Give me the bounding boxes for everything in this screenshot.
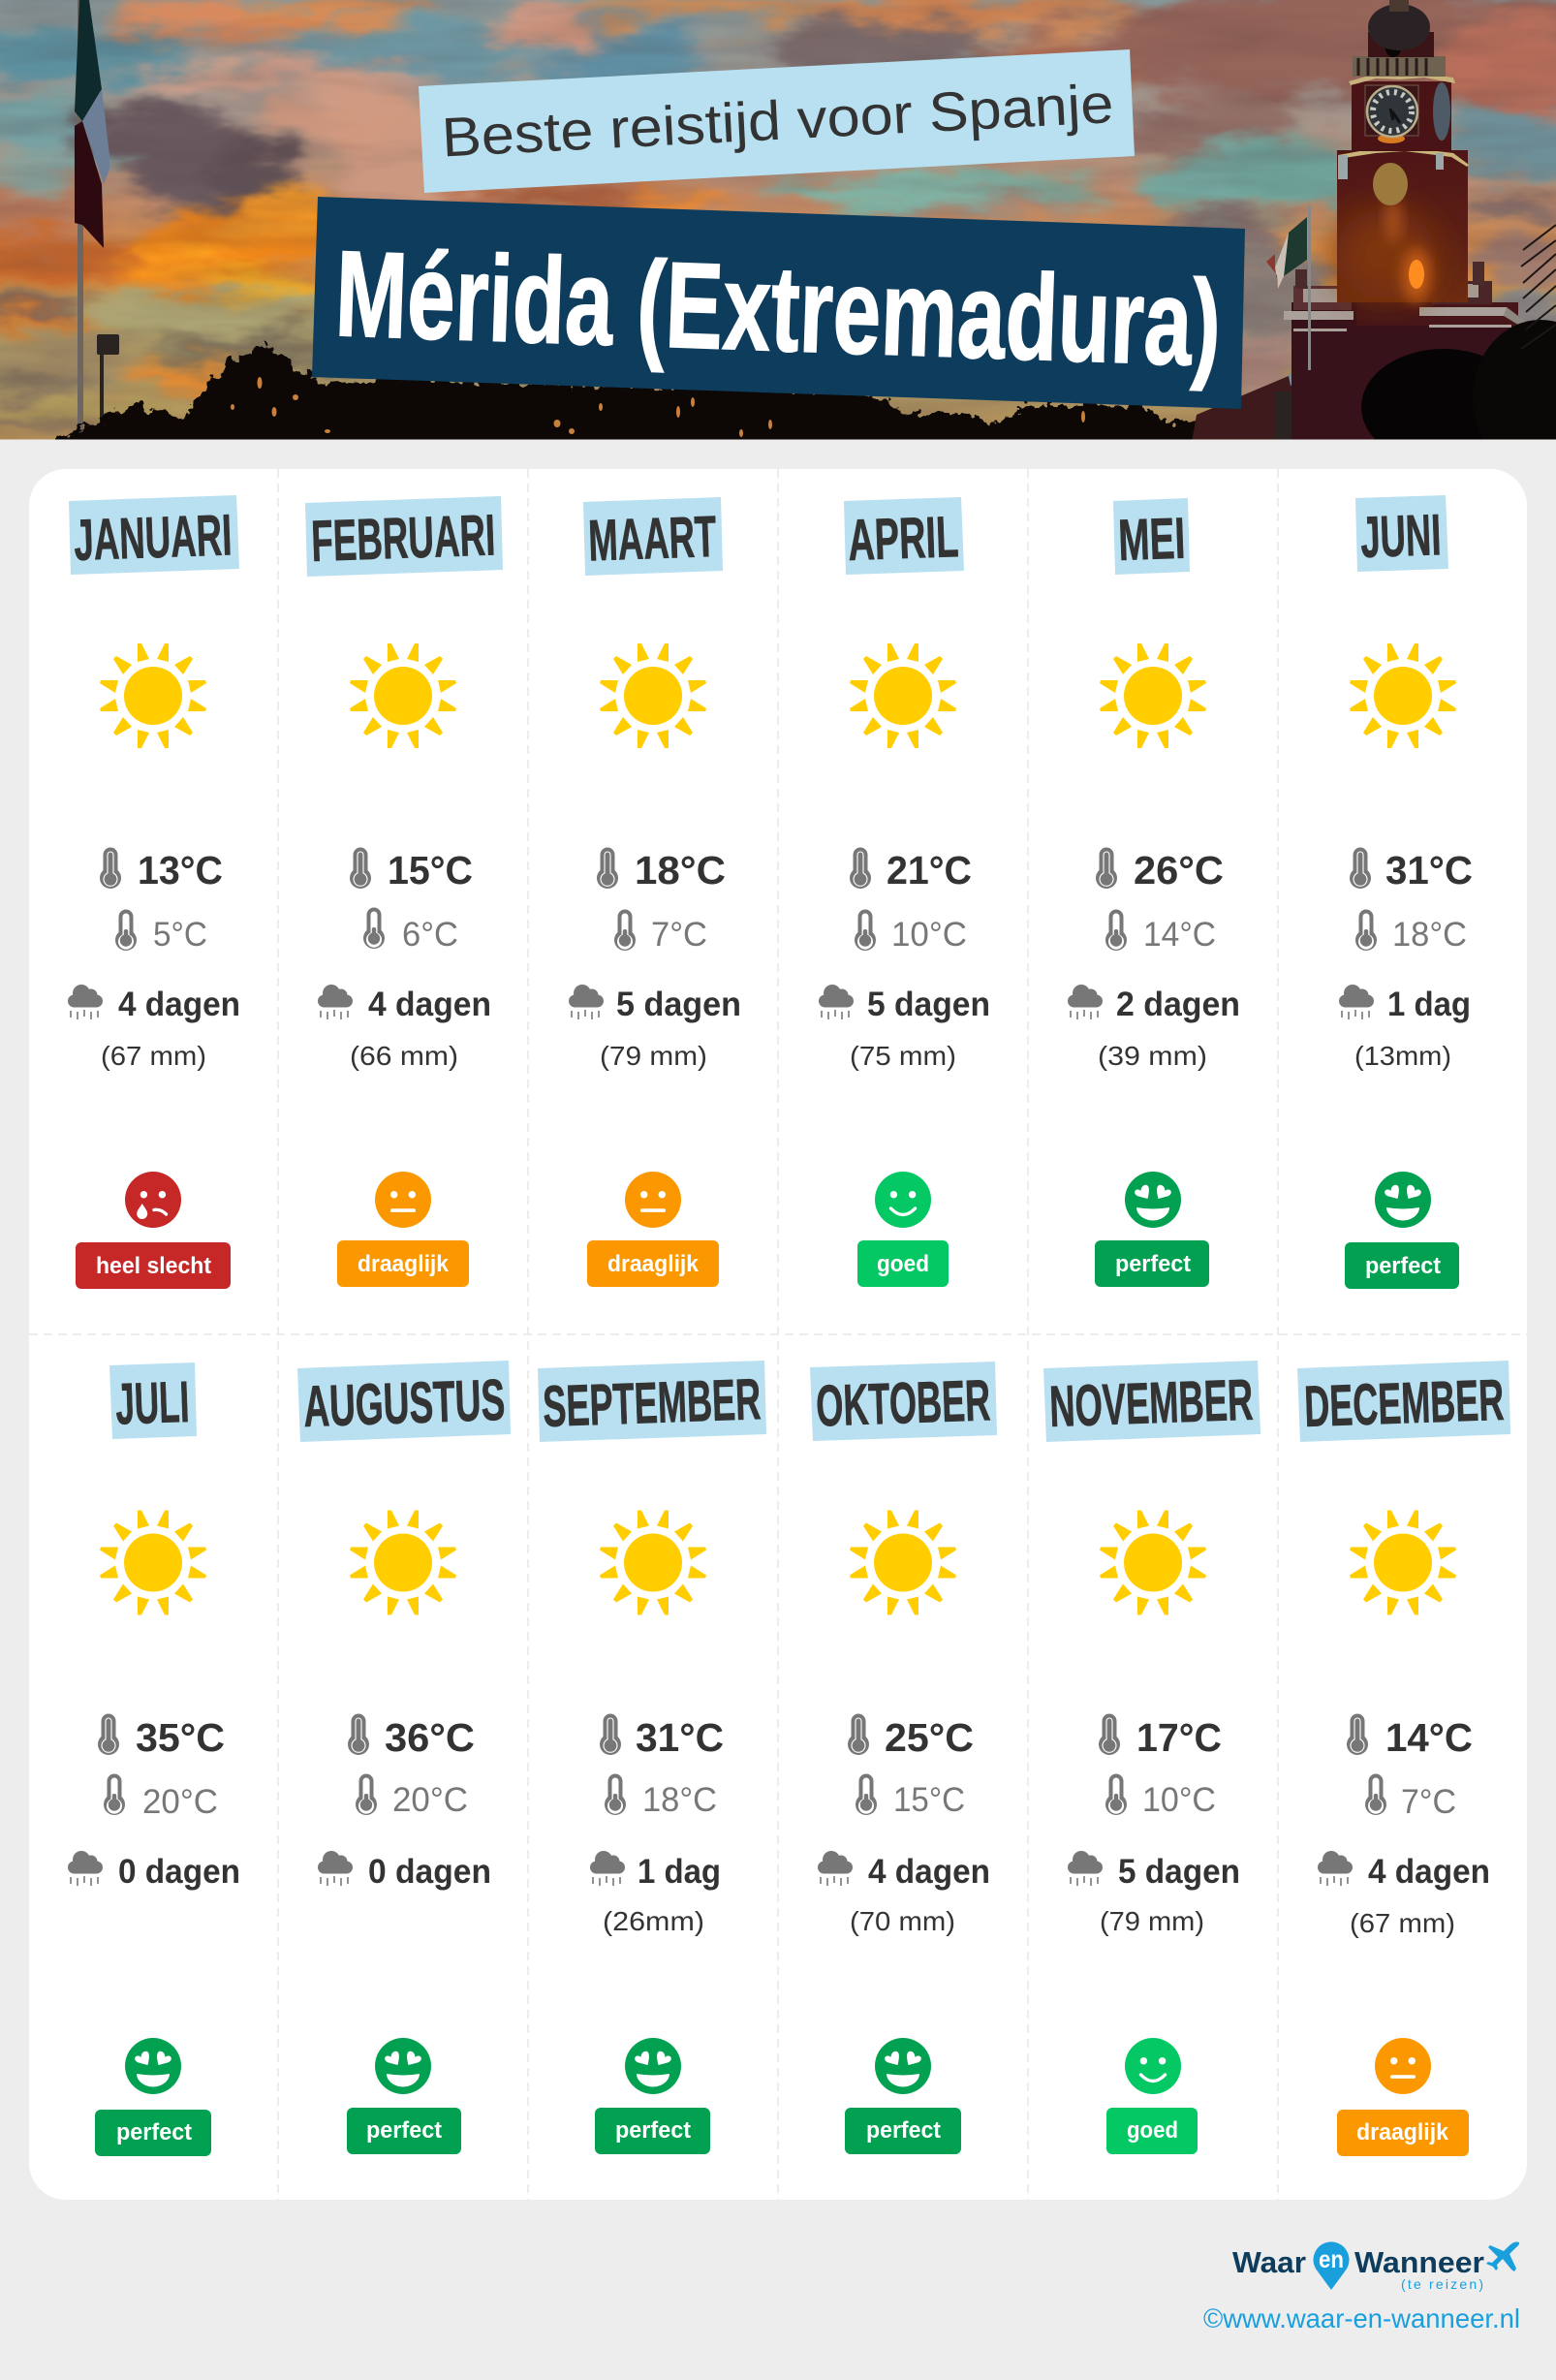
month label: AUGUSTUS xyxy=(302,1367,506,1439)
rainfall: (67 mm) xyxy=(101,1041,206,1071)
rating badge: heel slecht xyxy=(96,1253,211,1279)
month label: JULI xyxy=(114,1369,190,1436)
month: september xyxy=(538,1361,766,2154)
icon: sun xyxy=(100,643,206,748)
month label xyxy=(1355,495,1448,572)
cloud streak texture xyxy=(0,0,1556,440)
min temperature xyxy=(856,1773,965,1819)
rain days: 2 dagen xyxy=(1116,986,1240,1023)
max temperature: 31°C xyxy=(636,1715,724,1760)
cloud layers xyxy=(0,0,1556,436)
max temperature xyxy=(848,1713,974,1760)
card dividers xyxy=(29,469,1527,2200)
min temperature xyxy=(1355,909,1467,954)
min temperature: 18°C xyxy=(642,1781,717,1819)
rating badge xyxy=(76,1242,231,1289)
max temperature: 31°C xyxy=(1385,848,1473,892)
min temperature: 15°C xyxy=(893,1781,965,1819)
rain days: 1 dag xyxy=(638,1853,721,1891)
rain days: 5 dagen xyxy=(867,986,990,1023)
month label: MEI xyxy=(1117,506,1186,573)
month label xyxy=(810,1362,997,1441)
icon: rating face xyxy=(875,1172,931,1228)
rating badge: goed xyxy=(1127,2117,1178,2144)
rating badge xyxy=(337,1240,469,1287)
min temperature xyxy=(104,1773,218,1821)
rain days: 4 dagen xyxy=(1368,1853,1490,1891)
min temperature xyxy=(1365,1773,1456,1821)
rain days xyxy=(1068,1851,1240,1891)
min temperature: 20°C xyxy=(392,1781,468,1819)
rain days xyxy=(819,985,990,1023)
min temperature xyxy=(1105,1773,1216,1819)
footer: website url: ©www.waar-en-wanneer.nl xyxy=(1203,2303,1520,2333)
rain days: 4 dagen xyxy=(118,986,240,1023)
max temperature xyxy=(1099,1713,1222,1760)
min temperature: 18°C xyxy=(1392,916,1467,954)
rainfall: (79 mm) xyxy=(1100,1906,1204,1936)
rating badge: goed xyxy=(877,1251,929,1277)
subtitle banner: Beste reistijd voor Spanje xyxy=(440,73,1115,169)
icon: sun xyxy=(1100,1510,1206,1614)
icon: rating face xyxy=(625,1172,681,1228)
rain days: 5 dagen xyxy=(1118,1853,1240,1891)
min temperature: 14°C xyxy=(1143,916,1216,954)
max temperature xyxy=(597,847,726,892)
rain days xyxy=(68,985,240,1023)
max temperature: 18°C xyxy=(635,848,726,892)
rain days xyxy=(318,985,491,1023)
month: oktober xyxy=(810,1362,997,2154)
icon: sun xyxy=(350,643,456,748)
rain days xyxy=(590,1851,721,1891)
rating badge: perfect xyxy=(615,2117,691,2144)
max temperature: 17°C xyxy=(1136,1715,1222,1760)
rainfall: (79 mm) xyxy=(600,1041,707,1071)
max temperature: 15°C xyxy=(388,848,473,892)
icon: sun xyxy=(850,1510,956,1614)
min temperature xyxy=(605,1773,717,1819)
rating badge xyxy=(1345,1242,1459,1289)
month label: JANUARI xyxy=(73,502,233,573)
sky base xyxy=(0,0,1556,440)
icon: sun xyxy=(600,1510,706,1614)
rain days xyxy=(1318,1851,1490,1891)
rainfall: (26mm) xyxy=(603,1906,704,1936)
max temperature xyxy=(350,847,473,892)
rating badge xyxy=(95,2110,211,2156)
month: februari xyxy=(305,496,503,1287)
town hall clock tower xyxy=(1192,0,1526,442)
min temperature: 5°C xyxy=(153,916,207,954)
month label xyxy=(109,1362,197,1439)
icon: rating face xyxy=(1125,2038,1181,2094)
min temperature xyxy=(363,907,458,954)
rating badge: perfect xyxy=(866,2117,941,2144)
rainfall: (39 mm) xyxy=(1098,1041,1207,1071)
min temperature: 10°C xyxy=(891,916,967,954)
min temperature xyxy=(115,909,207,954)
rain days: 4 dagen xyxy=(368,986,491,1023)
min temperature: 6°C xyxy=(402,916,458,954)
month: maart xyxy=(569,497,741,1287)
rain days: 0 dagen xyxy=(368,1853,491,1891)
max temperature xyxy=(348,1713,475,1760)
rain days: 5 dagen xyxy=(616,986,741,1023)
month: december xyxy=(1297,1361,1510,2156)
title banner: Mérida (Extremadura) xyxy=(333,225,1223,391)
max temperature: 36°C xyxy=(385,1715,475,1760)
icon: sun xyxy=(1350,643,1456,748)
month: april xyxy=(819,497,990,1287)
max temperature: 25°C xyxy=(885,1715,974,1760)
rain days xyxy=(68,1851,240,1891)
footer: logo Waar en Wanneer xyxy=(1232,2241,1519,2292)
rating badge xyxy=(587,1240,719,1287)
icon: sun xyxy=(600,643,706,748)
rating badge xyxy=(857,1240,949,1287)
month: juni xyxy=(1339,495,1473,1289)
icon: map pin with "en" xyxy=(1314,2241,1349,2290)
max temperature xyxy=(1347,1713,1473,1760)
icon: sun xyxy=(350,1510,456,1614)
subtitle banner xyxy=(419,49,1135,193)
month label: SEPTEMBER xyxy=(542,1366,762,1439)
rating badge: perfect xyxy=(366,2117,442,2144)
icon: rating face xyxy=(375,1172,431,1228)
month label: OKTOBER xyxy=(815,1367,991,1438)
rating badge xyxy=(1337,2110,1469,2156)
max temperature xyxy=(98,1713,225,1760)
footer: logo Waar en Wanneer: Wanneer xyxy=(1354,2245,1484,2279)
rating badge xyxy=(1106,2108,1198,2154)
month label xyxy=(1113,498,1190,575)
max temperature xyxy=(1350,847,1473,892)
icon: sun xyxy=(100,1510,206,1614)
tree line silhouette xyxy=(55,340,1196,440)
month: mei xyxy=(1068,498,1240,1287)
icon: rating face xyxy=(125,1172,181,1228)
rainfall: (13mm) xyxy=(1354,1041,1451,1071)
footer: logo Waar en Wanneer: (te reizen) xyxy=(1401,2276,1483,2292)
tree light specks xyxy=(231,377,1085,437)
rain days xyxy=(1339,985,1471,1023)
month: januari xyxy=(68,495,240,1289)
rainfall: (75 mm) xyxy=(850,1041,956,1071)
min temperature xyxy=(855,909,967,954)
title banner xyxy=(312,197,1245,409)
month label: MAART xyxy=(587,504,717,573)
rating badge: perfect xyxy=(1365,1253,1441,1279)
month label: APRIL xyxy=(847,504,959,573)
street lamp xyxy=(97,334,119,432)
max temperature xyxy=(1096,847,1224,892)
min temperature xyxy=(614,909,707,954)
icon: sun xyxy=(1100,643,1206,748)
icon: rating face xyxy=(1375,1172,1431,1228)
max temperature: 21°C xyxy=(887,848,972,892)
rating badge xyxy=(845,2108,961,2154)
rainfall: (66 mm) xyxy=(350,1041,458,1071)
max temperature xyxy=(850,847,972,892)
icon: rating face xyxy=(1125,1172,1181,1228)
min temperature xyxy=(1105,909,1216,954)
min temperature: 7°C xyxy=(1401,1783,1456,1821)
rating badge: perfect xyxy=(116,2119,192,2145)
rain days xyxy=(318,1851,491,1891)
icon: rating face xyxy=(1375,2038,1431,2094)
month label xyxy=(538,1361,766,1442)
min temperature: 7°C xyxy=(651,916,707,954)
rain days xyxy=(569,985,741,1023)
icon: sun xyxy=(850,643,956,748)
month label xyxy=(844,497,964,575)
rain days: 4 dagen xyxy=(868,1853,990,1891)
month: juli xyxy=(68,1362,240,2156)
icon: map pin with "en": en xyxy=(1319,2246,1344,2273)
rating badge: perfect xyxy=(1115,1251,1191,1277)
rating badge xyxy=(595,2108,710,2154)
rating badge: draaglijk xyxy=(358,1251,450,1277)
rainfall: (67 mm) xyxy=(1350,1908,1455,1938)
rain days: 0 dagen xyxy=(118,1853,240,1891)
month label: FEBRUARI xyxy=(310,502,496,574)
month: november xyxy=(1043,1361,1260,2154)
month label: JUNI xyxy=(1359,502,1442,570)
icon: sun xyxy=(1350,1510,1456,1614)
month label xyxy=(1043,1361,1260,1442)
hero: sunset photo with clock tower xyxy=(0,0,1556,475)
left flag pole xyxy=(75,0,109,440)
icon: rating face xyxy=(625,2038,681,2094)
month: augustus xyxy=(297,1361,511,2154)
rain days: 1 dag xyxy=(1387,986,1471,1023)
icon: rating face xyxy=(125,2038,181,2094)
footer: logo Waar en Wanneer: Waar xyxy=(1232,2245,1306,2279)
max temperature: 14°C xyxy=(1385,1715,1473,1760)
month label xyxy=(583,497,723,576)
max temperature xyxy=(600,1713,724,1760)
rating badge xyxy=(347,2108,461,2154)
icon: airplane xyxy=(1486,2242,1519,2271)
rain days xyxy=(818,1851,990,1891)
rating badge: draaglijk xyxy=(607,1251,700,1277)
min temperature: 10°C xyxy=(1142,1781,1216,1819)
max temperature: 13°C xyxy=(138,848,223,892)
rating badge: draaglijk xyxy=(1356,2119,1449,2145)
min temperature: 20°C xyxy=(142,1783,218,1821)
month label: NOVEMBER xyxy=(1048,1367,1254,1439)
panel: months card xyxy=(29,469,1527,2200)
max temperature: 26°C xyxy=(1134,848,1224,892)
month label xyxy=(69,495,239,575)
right flag xyxy=(1266,205,1311,370)
icon: rating face xyxy=(375,2038,431,2094)
max temperature: 35°C xyxy=(136,1715,225,1760)
rating badge xyxy=(1095,1240,1209,1287)
max temperature xyxy=(100,847,223,892)
month label xyxy=(297,1361,511,1442)
month label xyxy=(305,496,503,577)
palm trees xyxy=(1361,224,1556,440)
rainfall: (70 mm) xyxy=(850,1906,955,1936)
rain days xyxy=(1068,985,1240,1023)
icon: rating face xyxy=(875,2038,931,2094)
min temperature xyxy=(356,1773,468,1819)
